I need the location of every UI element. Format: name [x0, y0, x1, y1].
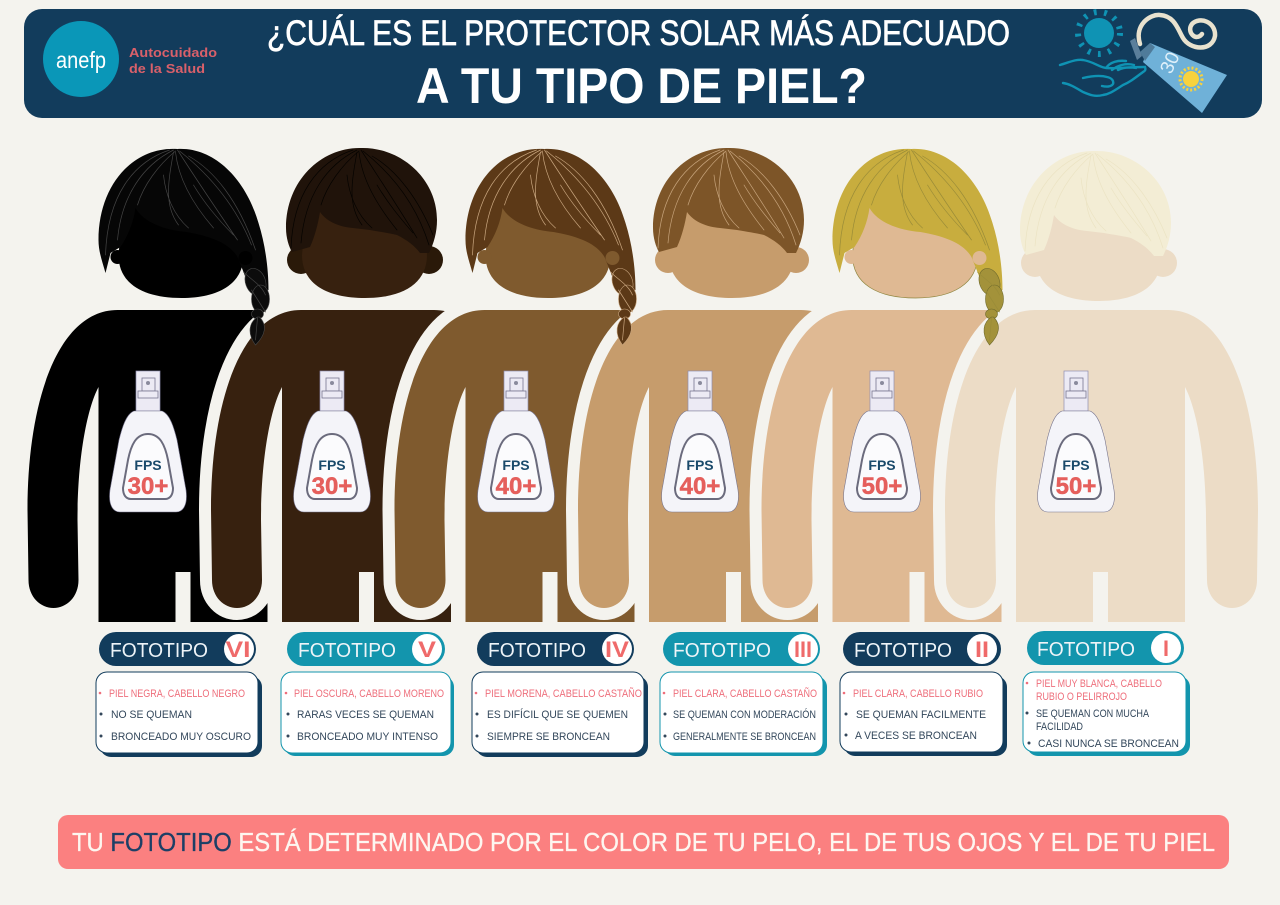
- bottle: FPS 30+ (V): 30+: [312, 473, 352, 500]
- panel: fototipo V: [281, 632, 454, 756]
- bottle: FPS 40+ (III): 40+: [680, 473, 720, 500]
- bottle: FPS 30+ (VI): 30+: [128, 473, 168, 500]
- label pill V: V: [418, 637, 436, 662]
- body: fototipo V: [211, 310, 524, 622]
- bottle: FPS 50+ (II): 50+: [862, 473, 902, 500]
- card I: PIEL MUY BLANCA, CABELLO: [1036, 678, 1162, 690]
- card I: CASI NUNCA SE BRONCEAN: [1038, 738, 1179, 750]
- card VI: BRONCEADO MUY OSCURO: [111, 731, 251, 743]
- card II: SE QUEMAN FACILMENTE: [856, 709, 986, 721]
- body: fototipo II: [762, 310, 1074, 622]
- bottle: FPS 30+ (VI): FPS: [134, 457, 162, 473]
- card IV: ES DIFÍCIL QUE SE QUEMEN: [487, 708, 628, 721]
- title: [267, 14, 1010, 114]
- logo tagline: de la Salud: [129, 61, 205, 76]
- card IV: SIEMPRE SE BRONCEAN: [487, 731, 610, 743]
- card I: FACILIDAD: [1036, 721, 1083, 733]
- logo tagline: [129, 45, 217, 76]
- card III: PIEL CLARA, CABELLO CASTAÑO: [673, 687, 817, 700]
- head: fototipo I, short very light hair: [1020, 151, 1177, 301]
- card I: [1023, 672, 1190, 756]
- head: fototipo V, short dark hair: [286, 148, 443, 298]
- card V: [281, 672, 454, 756]
- card I: SE QUEMAN CON MUCHA: [1036, 708, 1150, 720]
- card III: SE QUEMAN CON MODERACIÓN: [673, 708, 816, 721]
- card IV: PIEL MORENA, CABELLO CASTAÑO: [485, 687, 642, 700]
- bottle: FPS 30+ (VI): [110, 371, 186, 512]
- panel: fototipo IV: [472, 632, 648, 757]
- figure bodies, dark to light, each with a halo: [28, 310, 1258, 622]
- body: fototipo VI: [28, 310, 340, 622]
- bottle: FPS 40+ (III): FPS: [686, 457, 714, 473]
- label pill III: [663, 632, 820, 666]
- bottle: FPS 50+ (I): [1038, 371, 1114, 512]
- bottle: FPS 30+ (V): [294, 371, 370, 512]
- label pill VI: [99, 632, 256, 666]
- label pill IV: [477, 632, 634, 666]
- card V: RARAS VECES SE QUEMAN: [297, 709, 434, 721]
- label pill V: FOTOTIPO: [298, 640, 396, 662]
- label pill II: II: [975, 637, 989, 662]
- label pill VI: VI: [226, 637, 250, 662]
- head: fototipo II, long blond hair with braid: [832, 149, 1004, 345]
- label pill IV: FOTOTIPO: [488, 640, 586, 662]
- label pill I: [1027, 631, 1184, 665]
- bottle: FPS 50+ (II): [844, 371, 920, 512]
- card II: PIEL CLARA, CABELLO RUBIO: [853, 688, 983, 700]
- icon: sun, hand and sunscreen tube: [1060, 12, 1227, 113]
- head: fototipo VI, long black hair with braid: [98, 149, 270, 345]
- label pill VI: FOTOTIPO: [110, 640, 208, 662]
- bottle: FPS 40+ (IV): FPS: [502, 457, 530, 473]
- body: fototipo III: [578, 310, 891, 622]
- label pill I: I: [1163, 636, 1169, 661]
- footer callout: TU FOTOTIPO ESTÁ DETERMINADO POR EL COLOR DE TU PELO, EL DE TUS OJOS Y EL DE TU PIEL: [72, 827, 1215, 857]
- bottle: FPS 30+ (V): FPS: [318, 457, 346, 473]
- panel: fototipo II: [840, 632, 1007, 756]
- bottle: FPS 40+ (IV): 40+: [496, 473, 536, 500]
- panel: fototipo VI: [96, 632, 262, 757]
- card VI: NO SE QUEMAN: [111, 709, 192, 721]
- label pill V: [287, 632, 445, 666]
- label pill I: FOTOTIPO: [1037, 639, 1135, 661]
- card V: BRONCEADO MUY INTENSO: [297, 731, 438, 743]
- card I: RUBIO O PELIRROJO: [1036, 691, 1127, 703]
- title: ¿CUÁL ES EL PROTECTOR SOLAR MÁS ADECUADO: [267, 14, 1010, 53]
- bottle: FPS 50+ (I): 50+: [1056, 473, 1096, 500]
- label pill II: FOTOTIPO: [854, 640, 952, 662]
- bottle: FPS 50+ (I): FPS: [1062, 457, 1090, 473]
- panel: fototipo I: [1023, 631, 1190, 756]
- label pill II: [843, 632, 1001, 666]
- bottle: FPS 40+ (IV): [478, 371, 554, 512]
- label pill III: III: [794, 637, 812, 662]
- card III: GENERALMENTE SE BRONCEAN: [673, 731, 816, 743]
- title: A TU TIPO DE PIEL?: [416, 58, 867, 114]
- card IV: [472, 672, 648, 757]
- logo: anefp: [43, 21, 119, 97]
- card III: [660, 672, 827, 756]
- body: fototipo I: [945, 310, 1258, 622]
- card II: [840, 672, 1007, 756]
- icon: sun, hand and sunscreen tube: 30: [1156, 49, 1184, 77]
- body: fototipo IV: [394, 310, 708, 622]
- card II: A VECES SE BRONCEAN: [855, 730, 977, 742]
- label pill III: FOTOTIPO: [673, 640, 771, 662]
- bottle: FPS 40+ (III): [662, 371, 738, 512]
- header banner: [24, 9, 1262, 118]
- logo tagline: Autocuidado: [129, 45, 217, 60]
- footer callout: [58, 815, 1229, 869]
- card VI: PIEL NEGRA, CABELLO NEGRO: [109, 688, 245, 700]
- logo: anefp: anefp: [56, 47, 106, 73]
- card VI: [96, 672, 262, 757]
- bottle: FPS 50+ (II): FPS: [868, 457, 896, 473]
- label pill IV: IV: [605, 637, 629, 662]
- card V: PIEL OSCURA, CABELLO MORENO: [294, 688, 444, 700]
- head: fototipo IV, long brown hair with braid: [466, 149, 637, 345]
- head: fototipo III, short chestnut hair: [653, 148, 809, 298]
- panel: fototipo III: [660, 632, 827, 756]
